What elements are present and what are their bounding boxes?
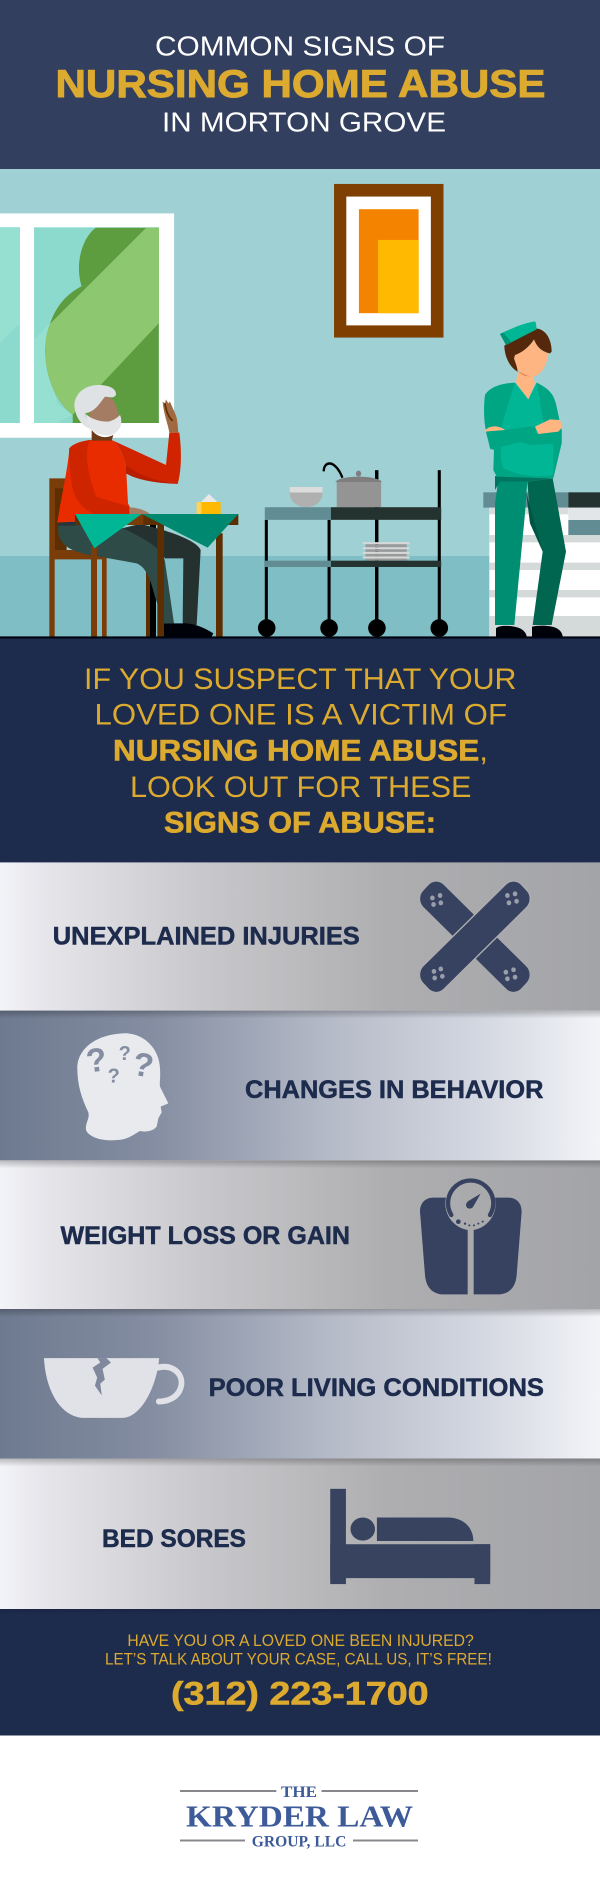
logo: THE [281,1784,317,1801]
intro panel [0,638,600,862]
call to action line 2: LET’S TALK ABOUT YOUR CASE, CALL US, IT’S FREE! [105,1651,492,1669]
band: unexplained injuries [0,862,600,1011]
intro line 3: NURSING HOME ABUSE , [113,734,488,767]
logo: KRYDER LAW [186,1798,413,1833]
title line 3: IN MORTON GROVE [162,107,446,138]
napkin box [197,494,221,514]
title line 2: NURSING HOME ABUSE [56,63,546,106]
icon: head with question marks: ? [84,1041,109,1081]
logo: GROUP, LLC [252,1834,346,1851]
seated elderly man at table [49,385,238,637]
chair [49,478,150,637]
window with tree [0,213,174,438]
call to action line 1: HAVE YOU OR A LOVED ONE BEEN INJURED? [127,1632,474,1650]
icon: head with question marks [77,1033,168,1140]
title line 1: COMMON SIGNS OF [155,31,445,62]
head, hair and cap [500,321,552,399]
band: poor living conditions [0,1309,600,1458]
footer call to action [0,1609,600,1736]
shoes [164,623,213,637]
icon: head with question marks: ? [119,1043,131,1065]
tablecloth [75,514,238,548]
table [75,514,238,637]
standing nurse [484,321,566,637]
band: weight loss or gain [0,1160,600,1309]
illustration: nursing home room scene [0,169,600,639]
trousers [58,522,201,625]
label: BED SORES [102,1525,246,1553]
cabinet [483,492,600,637]
phone number: (312) 223-1700 [171,1676,429,1712]
intro line 2: LOVED ONE IS A VICTIM OF [94,698,507,732]
serving cart [258,463,448,637]
label: WEIGHT LOSS OR GAIN [60,1222,350,1250]
intro line 1: IF YOU SUSPECT THAT YOUR [84,663,516,696]
icon: weighing scale [420,1181,522,1294]
scrub top [484,383,562,478]
intro line 5: SIGNS OF ABUSE: [164,807,436,840]
raised hand [163,399,178,433]
icon: head with question marks: ? [108,1066,120,1088]
intro line 4: LOOK OUT FOR THESE [130,771,472,804]
floor line [0,636,600,639]
framed picture [334,184,443,338]
band: changes in behavior [0,1011,600,1160]
shoes [496,626,563,637]
sweater [57,433,181,523]
trousers [495,476,566,625]
crossed arms [484,419,563,449]
label: UNEXPLAINED INJURIES [53,922,360,950]
icon: person in bed [330,1489,490,1584]
head with white hair and beard [74,385,121,441]
icon: crossed bandages [430,891,519,981]
label: CHANGES IN BEHAVIOR [245,1076,543,1104]
label: POOR LIVING CONDITIONS [209,1374,544,1402]
icon: cracked cup [44,1358,182,1418]
logo [180,1784,418,1851]
band: bed sores [0,1458,600,1609]
header panel [0,0,600,169]
icon: head with question marks: ? [130,1046,156,1086]
